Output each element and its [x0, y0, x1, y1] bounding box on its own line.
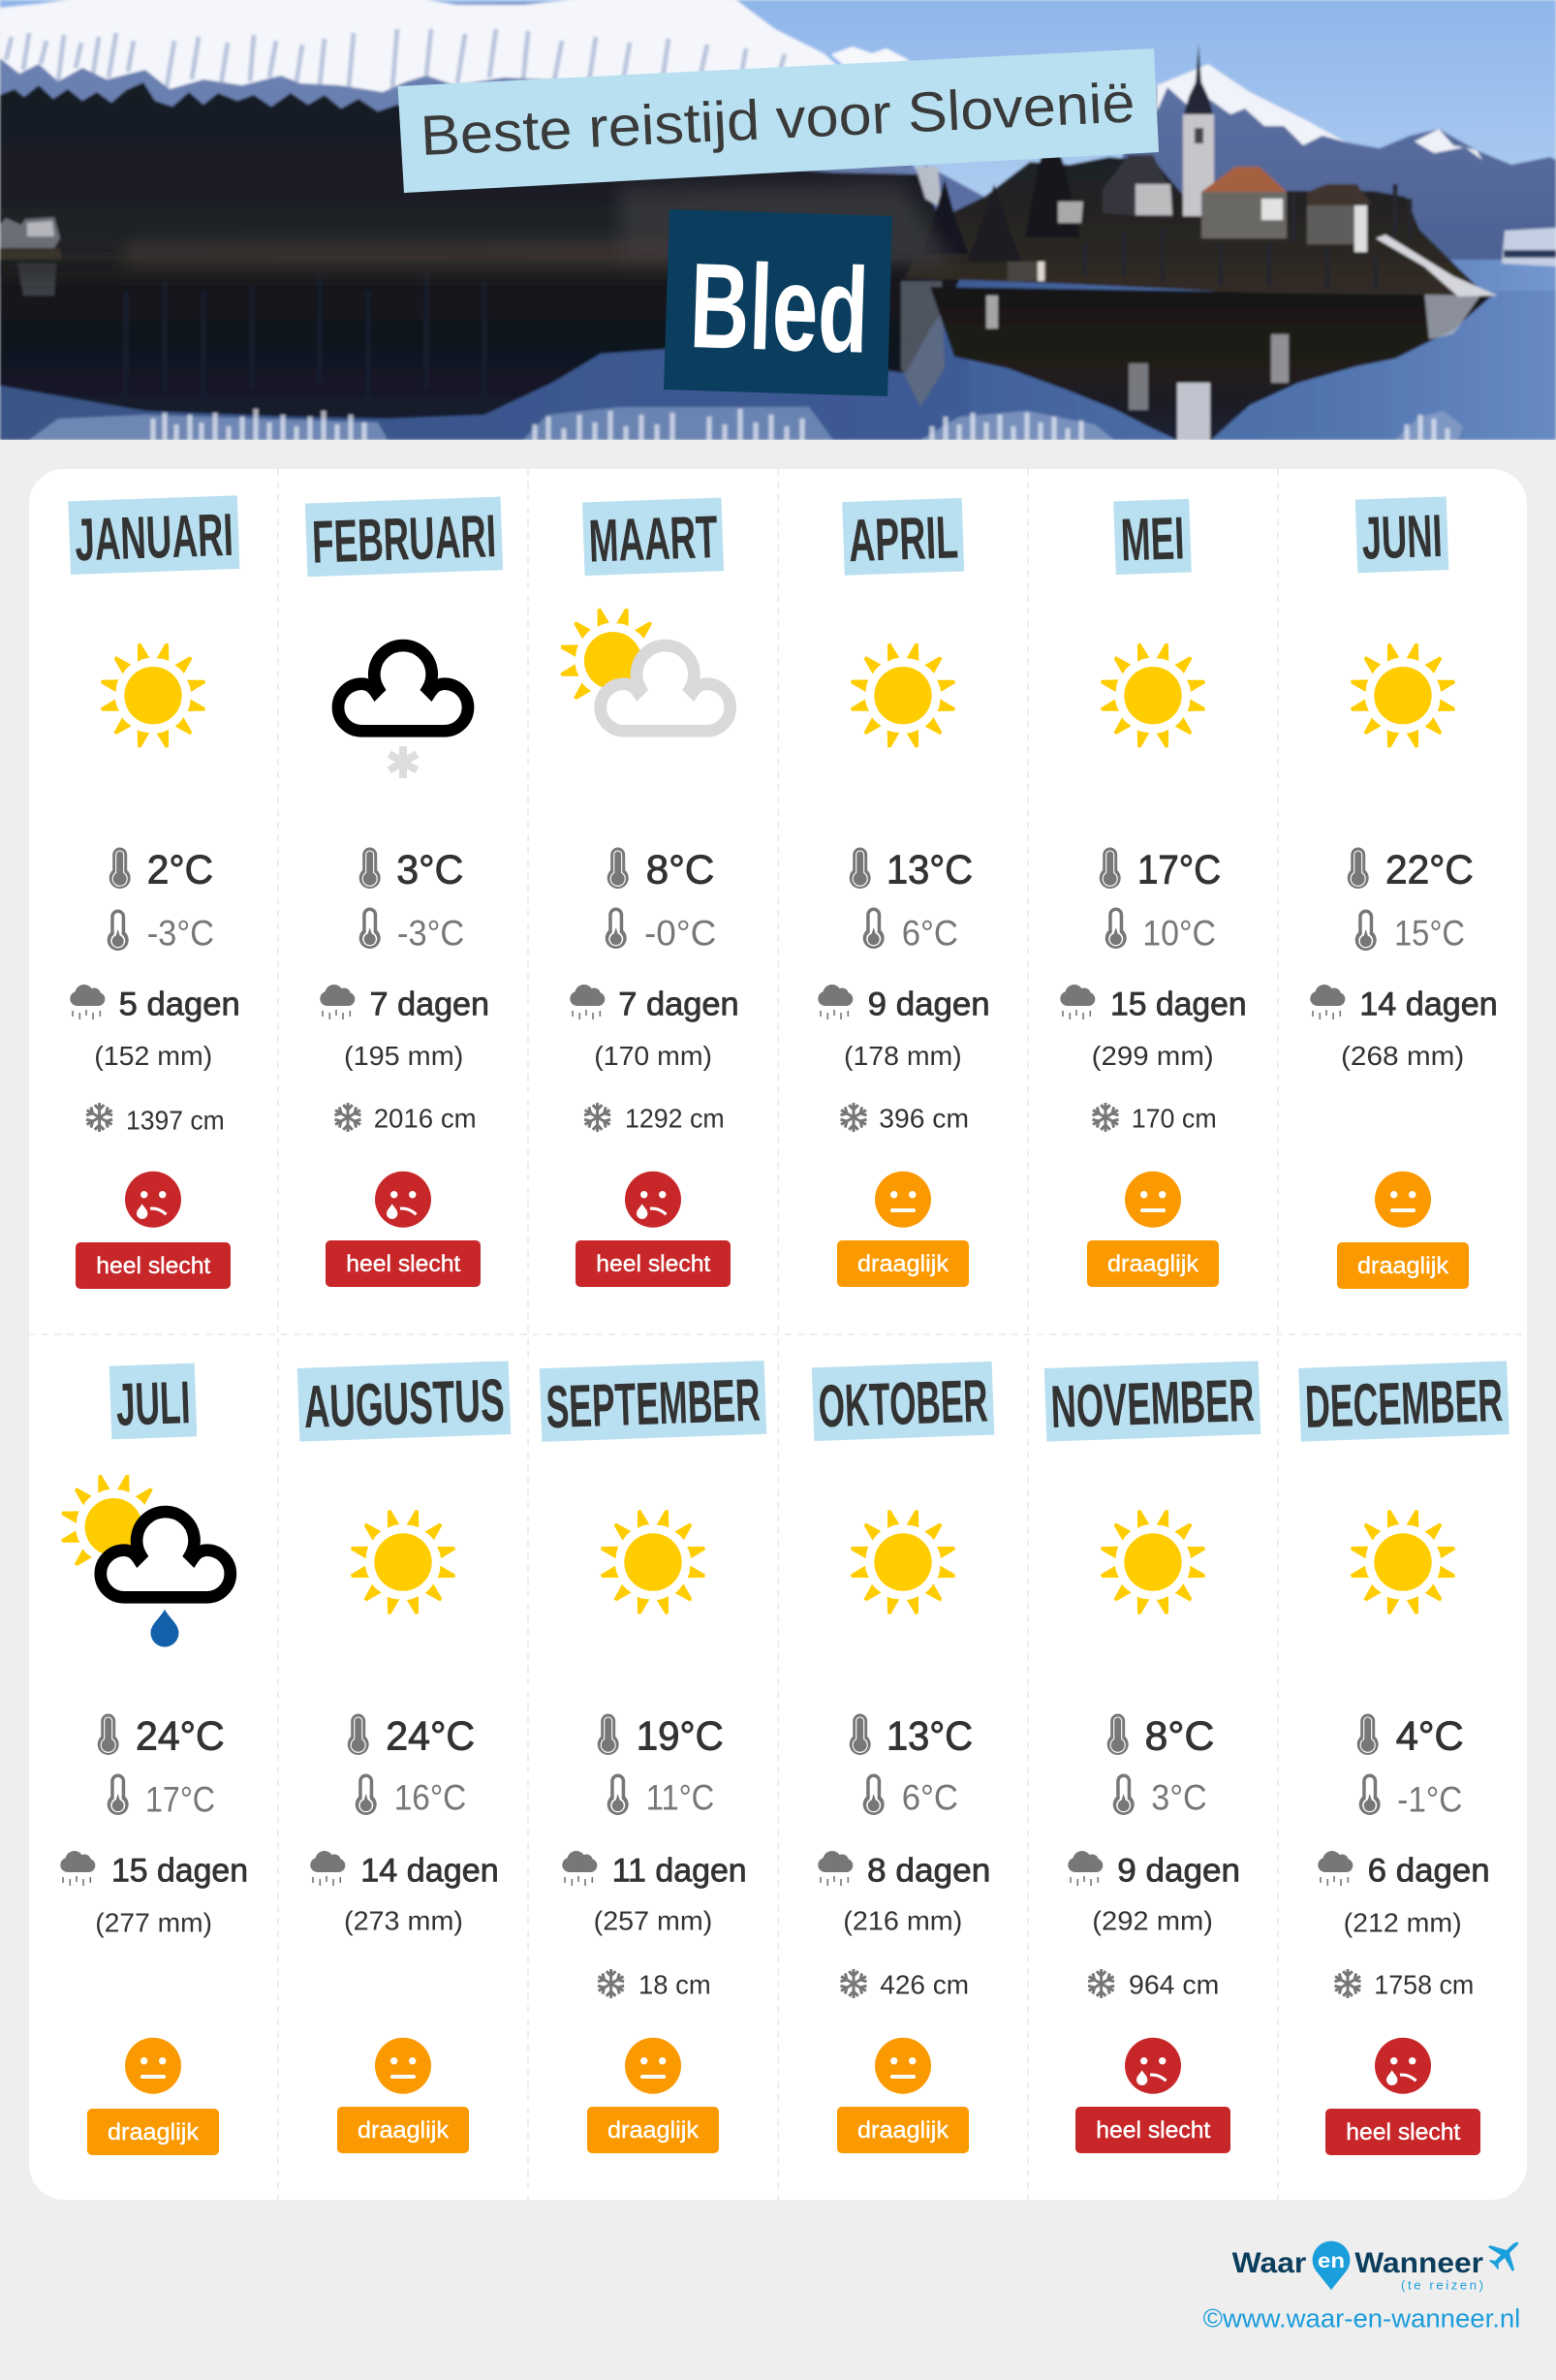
icon: sun: [850, 1509, 956, 1615]
icon: sun: [1100, 642, 1206, 749]
max temperature: 19°C: [637, 1713, 724, 1759]
panel: augustus: [297, 1361, 511, 2153]
month label: april: APRIL: [848, 504, 959, 575]
min temperature: 16°C: [394, 1778, 466, 1818]
month label: augustus: AUGUSTUS: [302, 1367, 506, 1441]
min temperature: -1°C: [1397, 1780, 1462, 1820]
month label: juli: JULI: [115, 1369, 191, 1439]
icon: thermometer low: [863, 1773, 885, 1815]
precipitation: (152 mm): [94, 1041, 212, 1071]
icon: sun: [1350, 1509, 1456, 1615]
rating: draaglijk: [87, 2109, 219, 2155]
snowfall: 396 cm: [879, 1103, 969, 1133]
month label: juli: [109, 1363, 197, 1439]
icon: thermometer low: [108, 1773, 129, 1815]
icon: rain cloud: [60, 1851, 95, 1886]
rating: heel slecht: [1075, 2107, 1230, 2153]
precipitation: (170 mm): [594, 1041, 712, 1071]
icon: neutral face: [1125, 1172, 1181, 1228]
precipitation: (212 mm): [1344, 1907, 1462, 1937]
icon: thermometer high: [850, 847, 871, 889]
rating: draaglijk: draaglijk: [108, 2119, 200, 2145]
month label: juni: JUNI: [1360, 503, 1444, 573]
icon: thermometer high: [1357, 1713, 1379, 1755]
rainy days: 7 dagen: [370, 986, 489, 1023]
icon: thermometer low: [359, 907, 381, 949]
icon: thermometer high: [98, 1713, 119, 1755]
panel: februari: [305, 497, 503, 1287]
icon: rain cloud: [1068, 1851, 1103, 1886]
panel: oktober: [812, 1362, 994, 2153]
rating: heel slecht: heel slecht: [346, 1251, 461, 1277]
icon: thermometer low: [1355, 909, 1377, 951]
icon: sun, cloud and rain drop: [60, 1474, 231, 1647]
icon: thermometer high: [348, 1713, 369, 1755]
precipitation: (277 mm): [95, 1907, 212, 1937]
icon: rain cloud: [570, 985, 605, 1019]
icon: thermometer low: [1105, 907, 1127, 949]
min temperature: -3°C: [147, 914, 214, 954]
icon: snowflake: [84, 1103, 114, 1132]
rating: draaglijk: draaglijk: [1357, 1253, 1449, 1279]
icon: sun: [850, 642, 956, 749]
icon: rain cloud: [562, 1851, 597, 1886]
rainy days: 7 dagen: [618, 986, 739, 1023]
month label: maart: MAART: [588, 504, 719, 576]
icon: thermometer low: [108, 909, 129, 951]
header photo: Lake Bled with church island and mountains: [0, 0, 1556, 440]
min temperature: 15°C: [1394, 914, 1465, 954]
icon: thermometer low: [863, 907, 885, 949]
rating: draaglijk: draaglijk: [1107, 1251, 1199, 1277]
icon: snowflake: [1091, 1103, 1120, 1132]
month label: januari: [68, 495, 239, 575]
icon: sun: [350, 1509, 456, 1615]
icon: rain cloud: [818, 1851, 853, 1886]
month label: november: NOVEMBER: [1049, 1367, 1256, 1441]
title banner: Beste reistijd voor Slovenië: [397, 48, 1159, 193]
logo: Waar en Wanneer: Waar: [1232, 2247, 1307, 2279]
icon: thermometer low: [1113, 1773, 1135, 1815]
icon: thermometer high: [109, 847, 131, 889]
icon: sun: [1350, 642, 1456, 749]
icon: crying face: [1125, 2038, 1181, 2094]
rating: heel slecht: [576, 1240, 731, 1287]
rating: heel slecht: heel slecht: [596, 1251, 711, 1277]
max temperature: 17°C: [1137, 847, 1221, 892]
panel: december: [1298, 1361, 1509, 2155]
icon: rain cloud: [310, 1851, 345, 1886]
precipitation: (178 mm): [844, 1041, 962, 1071]
min temperature: 6°C: [902, 914, 958, 954]
rainy days: 14 dagen: [360, 1853, 499, 1890]
month label: november: [1044, 1361, 1260, 1442]
precipitation: (299 mm): [1092, 1041, 1214, 1071]
icon: thermometer low: [1359, 1773, 1381, 1815]
rainy days: 14 dagen: [1359, 986, 1498, 1023]
rating: draaglijk: [837, 1240, 969, 1287]
rating: heel slecht: [76, 1242, 231, 1289]
snowfall: 18 cm: [638, 1969, 711, 1999]
icon: crying face: [1375, 2038, 1431, 2094]
month label: september: SEPTEMBER: [545, 1367, 762, 1441]
soft tonal patches for the photo: [0, 184, 954, 276]
icon: neutral face: [1375, 1172, 1431, 1228]
icon: crying face: [125, 1172, 181, 1228]
precipitation: (257 mm): [594, 1905, 712, 1935]
icon: crying face: [625, 1172, 681, 1228]
snowfall: 426 cm: [880, 1969, 969, 1999]
icon: location pin with en: [1313, 2241, 1350, 2290]
rating: draaglijk: draaglijk: [857, 2117, 949, 2144]
rainy days: 5 dagen: [119, 986, 240, 1023]
copyright url: ©www.waar-en-wanneer.nl: [1203, 2304, 1520, 2333]
panel: white climate table: [29, 469, 1527, 2200]
location banner: Bled: [664, 209, 892, 396]
rainy days: 15 dagen: [111, 1853, 248, 1890]
icon: snowflake: [1333, 1969, 1362, 1998]
rating: draaglijk: [1337, 1242, 1469, 1289]
icon: rain cloud: [320, 985, 355, 1019]
snowfall: 2016 cm: [374, 1103, 477, 1133]
icon: neutral face: [875, 2038, 931, 2094]
month label: maart: [582, 497, 724, 576]
rating: draaglijk: [837, 2107, 969, 2153]
icon: thermometer low: [607, 1773, 629, 1815]
panel: januari: [68, 495, 240, 1289]
icon: sun behind grey cloud: [560, 608, 731, 731]
min temperature: 17°C: [145, 1780, 215, 1820]
rating: heel slecht: [1325, 2109, 1480, 2155]
max temperature: 13°C: [887, 1713, 973, 1759]
month label: oktober: OKTOBER: [817, 1367, 989, 1441]
icon: thermometer high: [1100, 847, 1121, 889]
month label: april: [842, 498, 964, 576]
rating: heel slecht: heel slecht: [1346, 2119, 1461, 2145]
icon: thermometer high: [1348, 847, 1369, 889]
max temperature: 24°C: [386, 1713, 475, 1759]
rating: draaglijk: draaglijk: [857, 1251, 949, 1277]
rainy days: 11 dagen: [612, 1853, 747, 1890]
month label: januari: JANUARI: [74, 502, 234, 574]
rainy days: 9 dagen: [868, 986, 990, 1023]
rating: draaglijk: [587, 2107, 719, 2153]
icon: neutral face: [125, 2038, 181, 2094]
min temperature: 6°C: [902, 1778, 958, 1818]
icon: rain cloud: [818, 985, 853, 1019]
min temperature: 3°C: [1151, 1778, 1207, 1818]
icon: thermometer high: [598, 1713, 619, 1755]
logo: Waar en Wanneer: (te reizen): [1401, 2278, 1483, 2293]
rating: heel slecht: heel slecht: [1096, 2117, 1211, 2144]
max temperature: 22°C: [1385, 847, 1474, 892]
rating: draaglijk: [337, 2107, 469, 2153]
min temperature: -0°C: [644, 914, 716, 954]
icon: thermometer high: [359, 847, 381, 889]
precipitation: (292 mm): [1092, 1905, 1213, 1935]
logo: Waar en Wanneer: Wanneer: [1354, 2247, 1483, 2279]
min temperature: 10°C: [1142, 914, 1216, 954]
icon: thermometer high: [1107, 1713, 1129, 1755]
month label: september: [540, 1361, 766, 1442]
rainy days: 15 dagen: [1110, 986, 1247, 1023]
max temperature: 2°C: [147, 847, 213, 892]
max temperature: 8°C: [646, 847, 714, 892]
icon: snowflake: [596, 1969, 626, 1998]
panel: juni: [1310, 496, 1498, 1289]
icon: snowflake: [1086, 1969, 1116, 1998]
precipitation: (273 mm): [344, 1905, 463, 1935]
min temperature: -3°C: [397, 914, 464, 954]
snowfall: 1292 cm: [625, 1103, 725, 1133]
rating: draaglijk: draaglijk: [607, 2117, 700, 2144]
precipitation: (216 mm): [843, 1905, 962, 1935]
icon: neutral face: [375, 2038, 431, 2094]
icon: snowflake: [582, 1103, 612, 1132]
snowfall: 1397 cm: [126, 1106, 225, 1136]
icon: rain cloud: [70, 985, 105, 1019]
icon: neutral face: [875, 1172, 931, 1228]
panel: mei: [1060, 499, 1247, 1287]
icon: sun: [100, 642, 206, 749]
icon: airplane: [1488, 2242, 1518, 2271]
icon: sun: [1100, 1509, 1206, 1615]
panel: september: [540, 1361, 766, 2153]
month label: oktober: [812, 1362, 994, 1441]
min temperature: 11°C: [646, 1778, 714, 1818]
month label: mei: MEI: [1120, 505, 1186, 575]
month label: februari: FEBRUARI: [311, 503, 497, 577]
panel: maart: [560, 497, 739, 1287]
max temperature: 8°C: [1145, 1713, 1214, 1759]
rating: draaglijk: draaglijk: [358, 2117, 450, 2144]
max temperature: 3°C: [396, 847, 463, 892]
snowfall: 170 cm: [1132, 1103, 1217, 1133]
icon: neutral face: [625, 2038, 681, 2094]
icon: rain cloud: [1318, 1851, 1353, 1886]
icon: crying face: [375, 1172, 431, 1228]
icon: thermometer high: [607, 847, 629, 889]
month label: juni: [1355, 496, 1448, 573]
icon: sun: [600, 1509, 706, 1615]
rainy days: 8 dagen: [867, 1853, 990, 1890]
precipitation: (195 mm): [344, 1041, 463, 1071]
month label: augustus: [297, 1361, 511, 1442]
max temperature: 24°C: [136, 1713, 225, 1759]
icon: rain cloud: [1310, 985, 1345, 1019]
rating: draaglijk: [1087, 1240, 1219, 1287]
location banner: Bled: Bled: [688, 238, 870, 379]
logo: Waar en Wanneer: [1232, 2241, 1518, 2293]
rainy days: 9 dagen: [1117, 1853, 1240, 1890]
month label: mei: [1113, 499, 1192, 575]
panel: april: [818, 498, 990, 1287]
rating: heel slecht: heel slecht: [96, 1253, 211, 1279]
icon: thermometer low: [606, 907, 627, 949]
rainy days: 6 dagen: [1368, 1853, 1490, 1890]
panel: juli: [60, 1363, 248, 2155]
icon: location pin with en: en: [1318, 2250, 1345, 2272]
precipitation: (268 mm): [1341, 1041, 1464, 1071]
snowfall: 964 cm: [1129, 1969, 1219, 1999]
icon: snowflake: [839, 1969, 868, 1998]
title banner: Beste reistijd voor Slovenië: Beste reistijd voor Slovenië: [420, 71, 1136, 168]
max temperature: 13°C: [887, 847, 973, 892]
max temperature: 4°C: [1396, 1713, 1464, 1759]
month label: februari: [305, 497, 503, 577]
icon: snowflake: [333, 1103, 362, 1132]
snowfall: 1758 cm: [1374, 1969, 1474, 1999]
panel: november: [1044, 1361, 1260, 2153]
icon: rain cloud: [1060, 985, 1095, 1019]
icon: snowflake: [839, 1103, 868, 1132]
icon: thermometer low: [356, 1773, 377, 1815]
rating: heel slecht: [326, 1240, 481, 1287]
icon: cloud with snow: [338, 645, 468, 778]
icon: thermometer high: [850, 1713, 871, 1755]
